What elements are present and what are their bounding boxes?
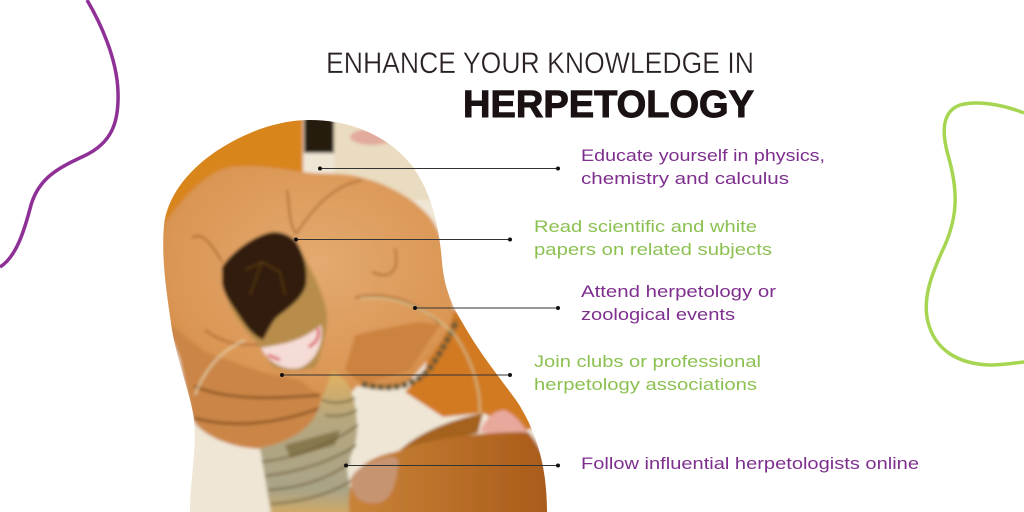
tip 3: events: zoological events <box>581 306 735 324</box>
tip 3: events: Attend herpetology or <box>581 283 777 301</box>
upper hand <box>150 166 453 410</box>
dark snake scales <box>222 232 307 340</box>
title line 1: ENHANCE YOUR KNOWLEDGE IN <box>326 47 754 80</box>
tip 4: associations: herpetology associations <box>534 376 757 394</box>
finger creases <box>192 180 440 345</box>
snake mouth <box>261 325 322 369</box>
forearm <box>404 308 532 432</box>
dark finger <box>400 413 483 450</box>
decorative curve: green <box>926 103 1024 365</box>
pointer line 2 <box>294 238 512 242</box>
pointer line 3 <box>413 306 560 310</box>
tip 1: physics <box>581 147 825 188</box>
pointer line 5 <box>344 464 560 468</box>
tip 2: papers: Read scientific and white <box>534 218 757 236</box>
tip 2: papers <box>534 218 772 259</box>
tip 2: papers: papers on related subjects <box>534 241 772 259</box>
bracelet <box>362 320 457 387</box>
tip 4: associations <box>534 353 761 394</box>
snake body <box>260 372 357 512</box>
snake head <box>222 232 327 371</box>
title <box>326 47 754 126</box>
photo: snake held in hands <box>163 120 547 512</box>
tip 4: associations: Join clubs or professional <box>534 353 761 371</box>
photo background <box>174 120 541 512</box>
lower right hand <box>349 432 555 512</box>
tip 1: physics: chemistry and calculus <box>581 170 789 188</box>
pink fingertip <box>480 410 530 440</box>
tip 3: events <box>581 283 777 324</box>
decorative curve: purple <box>0 0 118 267</box>
pointer line 1 <box>318 166 560 170</box>
lower fingers <box>172 328 320 451</box>
pointer line 4 <box>280 373 512 377</box>
snake hook wire <box>360 298 480 432</box>
tip 5: online: Follow influential herpetologists online <box>581 455 919 473</box>
tip 1: physics: Educate yourself in physics, <box>581 147 825 165</box>
title line 2: HERPETOLOGY <box>463 84 754 126</box>
